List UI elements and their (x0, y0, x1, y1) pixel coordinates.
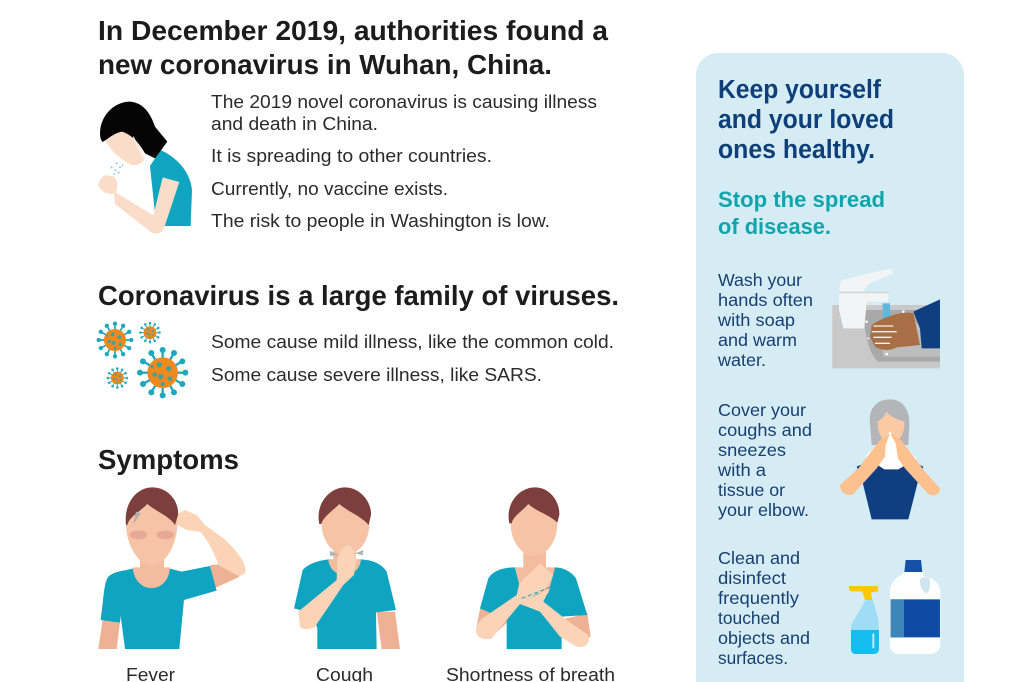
text block: illness facts: The 2019 novel coronavirus is causing illness (211, 91, 597, 112)
icon: viruses (97, 322, 188, 398)
text block: virus severity: Some cause severe illness, like SARS. (211, 364, 542, 385)
panel subheading: of disease. (718, 214, 831, 239)
panel: keep healthy (696, 53, 964, 682)
text: clean surfaces: touched (718, 608, 780, 628)
text: cover coughs: with a (717, 460, 766, 480)
icon: fever person (98, 487, 246, 649)
panel heading (718, 76, 894, 164)
text block: illness facts: Currently, no vaccine exists. (211, 178, 448, 199)
heading: December 2019: new coronavirus in Wuhan, China. (98, 49, 552, 80)
panel subheading: Stop the spread (718, 187, 885, 212)
symptom labels (126, 665, 615, 682)
icon: person coughing (98, 102, 192, 233)
text block: illness facts (211, 91, 597, 231)
text: clean surfaces: objects and (718, 628, 810, 648)
text: wash hands: hands often (718, 290, 813, 310)
text block: illness facts: and death in China. (211, 113, 378, 134)
text: cover coughs: tissue or (718, 480, 785, 500)
text block: illness facts: It is spreading to other countries. (211, 145, 492, 166)
icon: sneeze into tissue (840, 399, 940, 519)
text: cover coughs: Cover your (718, 400, 806, 420)
panel subheading (718, 187, 885, 239)
text: clean surfaces (718, 548, 810, 668)
icon: cleaning bottles (849, 560, 940, 654)
panel heading: Keep yourself (718, 76, 881, 104)
text block: illness facts: The risk to people in Washington is low. (211, 210, 550, 231)
text: cover coughs: sneezes (718, 440, 786, 460)
text: wash hands: Wash your (718, 270, 802, 290)
heading: symptoms: Symptoms (98, 444, 239, 475)
text: wash hands: with soap (717, 310, 795, 330)
text: clean surfaces: Clean and (718, 548, 800, 568)
text block: virus severity (211, 331, 614, 385)
text: clean surfaces: surfaces. (718, 648, 788, 668)
text: wash hands (717, 270, 813, 370)
text: cover coughs (717, 400, 812, 520)
icon: shortness of breath person (476, 487, 591, 649)
text block: virus severity: Some cause mild illness, like the common cold. (211, 331, 614, 352)
text: cover coughs: your elbow. (718, 500, 809, 520)
text: clean surfaces: disinfect (718, 568, 786, 588)
text: wash hands: and warm (718, 330, 797, 350)
heading: December 2019: In December 2019, authorities found a (98, 15, 608, 46)
text: cover coughs: coughs and (718, 420, 812, 440)
icon: cough person (294, 487, 400, 649)
panel heading: and your loved (718, 106, 894, 134)
text: wash hands: water. (717, 350, 766, 370)
icon: washing hands (832, 268, 940, 368)
heading: family of viruses: Coronavirus is a large family of viruses. (98, 280, 619, 311)
heading: December 2019 (98, 15, 608, 80)
text: clean surfaces: frequently (718, 588, 799, 608)
panel heading: ones healthy. (718, 136, 875, 164)
